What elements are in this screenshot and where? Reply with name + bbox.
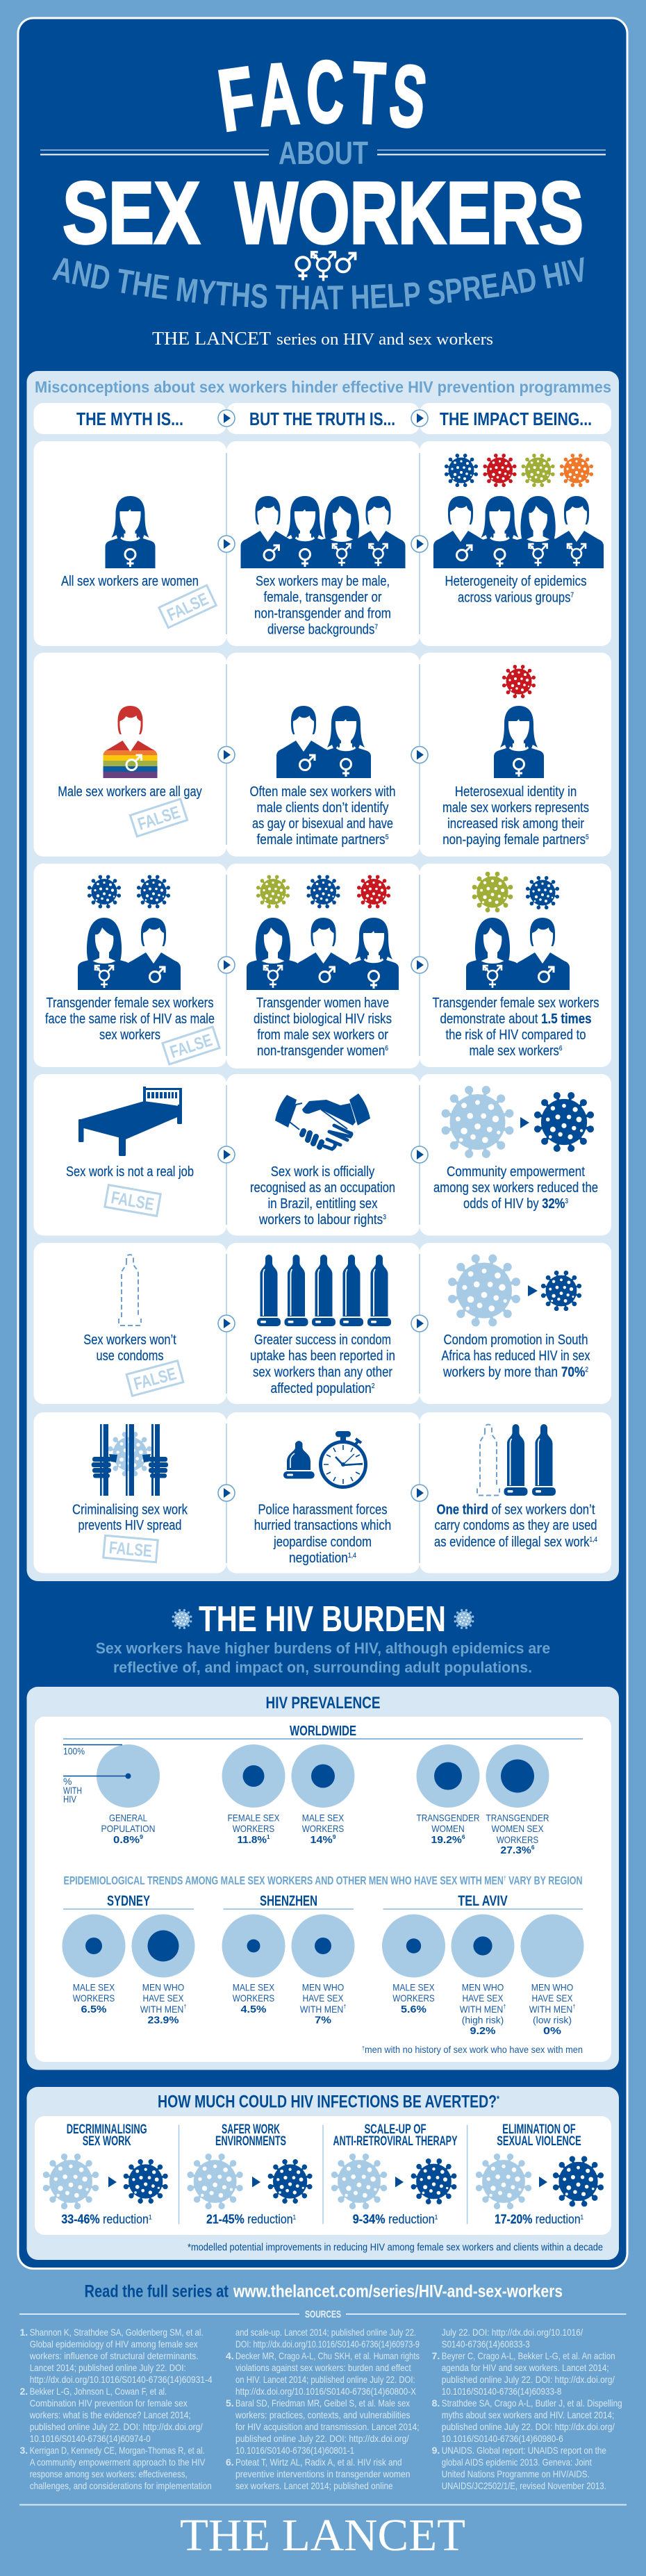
title: FACTS	[213, 43, 432, 150]
impact text: 3	[565, 1198, 568, 1205]
sources: column 2: violations against sex workers: burden and effect	[235, 2362, 411, 2373]
impact text: carry condoms as they are used	[435, 1518, 597, 1533]
impact text: 7	[570, 592, 574, 599]
chart: Shenzhen: 4.5%	[240, 2004, 267, 2015]
chart: Tel Aviv: †	[572, 2004, 575, 2010]
chart: Tel Aviv: WITH MEN	[460, 2004, 509, 2015]
sources: column 1: Global epidemiology of HIV among female sex	[30, 2338, 198, 2350]
labels: MALE SEX	[302, 1812, 345, 1823]
footer: The Lancet logo: THE LANCET	[180, 2510, 465, 2561]
stamp: false: FALSE	[135, 802, 183, 834]
icon: gender symbols	[296, 252, 356, 281]
truth text: negotiation	[289, 1551, 357, 1566]
sources: column 1	[19, 2327, 213, 2491]
sources: column 1: Kerrigan D, Kennedy CE, Morgan-Thomas R, et al.	[30, 2445, 205, 2456]
chart: Shenzhen: HAVE SEX	[303, 1992, 344, 2004]
labels: 9	[140, 1834, 144, 1840]
sources: column 2: and scale-up. Lancet 2014; published online July 22.	[235, 2327, 416, 2338]
sources: column 2: sex workers. Lancet 2014; published online	[235, 2480, 393, 2491]
row 2: male sex workers are all gay	[33, 653, 611, 857]
impact text: the risk of HIV compared to	[446, 1027, 586, 1043]
icon: four people	[240, 496, 406, 568]
impact text: Condom promotion in South	[443, 1332, 588, 1348]
scenario: elimination of sexual violence: SEXUAL VIOLENCE	[497, 2134, 581, 2149]
myth text: face the same risk of HIV as male	[45, 1012, 215, 1027]
myth text: Criminalising sex work	[72, 1502, 188, 1517]
truth text: recognised as an occupation	[250, 1180, 395, 1196]
scenario: scale-up of ART: SCALE-UP OF	[364, 2122, 426, 2137]
impact text: increased risk among their	[447, 816, 584, 832]
truth text	[250, 784, 396, 848]
impact text: 1,4	[589, 1536, 597, 1544]
scenario: safer work environments: 21-45% reduction	[206, 2213, 299, 2227]
legend: 100%	[63, 1745, 85, 1756]
column headers: BUT THE TRUTH IS...	[249, 408, 395, 429]
scenario: scale-up of ART: 1	[435, 2214, 438, 2221]
myth text: use condoms	[96, 1348, 164, 1364]
scenario: safer work environments: SAFER WORK	[222, 2122, 280, 2137]
truth text: Sex work is officially	[271, 1164, 374, 1180]
title: FACTS: C	[306, 43, 344, 141]
impact text: workers by more than 70%	[443, 1364, 589, 1380]
sources: column 1: A community empowerment approach to the HIV	[30, 2457, 206, 2468]
chart: Shenzhen: WITH MEN	[300, 2004, 349, 2015]
impact text: demonstrate about 1.5 times	[440, 1012, 592, 1027]
row 4: sex work is not a real job	[33, 1074, 611, 1235]
chart: Tel Aviv: 5.6%	[401, 2004, 426, 2015]
chart: worldwide prevalence	[63, 1724, 583, 1856]
chart: Tel Aviv: (high risk)	[462, 2015, 504, 2026]
chart: Tel Aviv: HAVE SEX	[463, 1992, 504, 2004]
title: FACTS: F	[213, 48, 260, 150]
sources: column 2: DOI: http://dx.doi.org/10.1016/S0140-6736(14)60973-9	[235, 2338, 420, 2350]
truth text: non-transgender and from	[254, 606, 391, 621]
chart: Tel Aviv: TEL AVIV	[458, 1893, 508, 1909]
chart: worldwide prevalence: WORLDWIDE	[290, 1724, 356, 1739]
truth text	[254, 996, 392, 1059]
myth text: Sex workers won’t	[83, 1332, 176, 1348]
title: SEX WORKERS	[63, 164, 583, 262]
title: ABOUT with rules: ABOUT	[279, 135, 368, 171]
impact text: Transgender female sex workers	[432, 996, 599, 1011]
sources: column 2: 5.	[226, 2397, 234, 2409]
chart: Tel Aviv: MEN WHO	[531, 1981, 573, 1992]
panel: misconceptions	[26, 371, 619, 1581]
chart: Shenzhen: WORKERS	[233, 1992, 274, 2004]
labels: 0.8%	[113, 1834, 137, 1846]
footnote: dagger: men with no history of sex work who have sex with men	[365, 2044, 583, 2055]
chart: Sydney	[63, 1893, 194, 2026]
truth text: workers to labour rights	[259, 1212, 404, 1228]
labels: WORKERS	[302, 1823, 344, 1834]
scenario: decriminalising: 33-46% reduction	[61, 2213, 155, 2227]
impact text: Heterogeneity of epidemics	[445, 574, 586, 589]
scenario: elimination of sexual violence	[476, 2122, 604, 2227]
scenario: scale-up of ART: 9-34% reduction	[353, 2213, 440, 2227]
myth text	[83, 1332, 176, 1364]
truth text: Transgender women have	[256, 996, 389, 1011]
chart: Sydney: 6.5%	[81, 2004, 107, 2015]
impact text	[442, 1332, 590, 1380]
sources: column 2: preventive interventions in transgender women	[235, 2468, 410, 2479]
sources: column 3: 10.1016/S0140-6736(14)60980-6	[442, 2433, 563, 2444]
sources: column 3: United Nations Programme on HIV/AIDS.	[442, 2468, 590, 2479]
labels	[101, 1812, 549, 1856]
chart: Shenzhen: 7%	[315, 2015, 331, 2026]
truth text: 2	[372, 1382, 375, 1390]
subheading: burden explanation: Sex workers have higher burdens of HIV, although epidemics are	[96, 1640, 550, 1657]
icon: handshake	[275, 1093, 370, 1149]
sources: column 3: published online July 22. DOI: http://dx.doi.org/	[442, 2421, 615, 2432]
column headers: THE IMPACT BEING...	[440, 408, 592, 429]
icon: woman	[106, 496, 156, 568]
sources: column 1: response among sex workers: effectiveness,	[30, 2468, 188, 2479]
chart: Shenzhen: MEN WHO	[302, 1981, 344, 1992]
labels: WORKERS	[497, 1834, 538, 1845]
heading: the HIV burden: THE HIV BURDEN	[199, 1599, 446, 1640]
icon: viruses and people	[78, 875, 181, 990]
labels: 1	[267, 1834, 270, 1840]
chart: Tel Aviv: †	[503, 2004, 506, 2010]
truth text: 1,4	[348, 1552, 356, 1560]
legend: HIV	[63, 1794, 77, 1805]
sources: column 2	[226, 2327, 420, 2491]
sources: column 3: 8.	[432, 2397, 440, 2409]
chart: Shenzhen	[222, 1893, 354, 2026]
myth text: Transgender female sex workers	[46, 996, 214, 1011]
chart: Shenzhen: MALE SEX	[233, 1981, 275, 1992]
icon: five condoms	[257, 1255, 391, 1326]
myth text: sex workers	[99, 1027, 160, 1043]
impact text: male sex workers represents	[442, 800, 589, 816]
icon: viruses and people	[466, 872, 570, 990]
sources: column 2: 4.	[226, 2350, 234, 2361]
sources: column 2: 10.1016/S0140-6736(14)60801-1	[235, 2445, 354, 2456]
chart: Tel Aviv: WITH MEN	[529, 2004, 579, 2015]
chart: Tel Aviv: MALE SEX	[392, 1981, 435, 1992]
stamp: false: FALSE	[108, 1538, 153, 1561]
truth text: female intimate partners	[257, 832, 406, 848]
truth text: non-transgender women	[257, 1043, 408, 1059]
impact text: Africa has reduced HIV in sex	[442, 1348, 590, 1364]
legend	[63, 1745, 85, 1805]
icon: rainbow man	[103, 706, 158, 778]
panel: infections averted	[26, 2087, 619, 2260]
scenario: decriminalising	[43, 2122, 168, 2227]
sources: column 3	[432, 2327, 622, 2491]
sources: column 3: global AIDS epidemic 2013. Geneva: Joint	[442, 2457, 592, 2468]
legend: WITH	[63, 1785, 82, 1796]
column headers	[33, 403, 611, 434]
scenario: scale-up of ART: ANTI-RETROVIRAL THERAPY	[333, 2134, 458, 2149]
stamp: false: FALSE	[132, 1364, 179, 1394]
stamp: false: FALSE	[110, 1188, 156, 1214]
labels: WOMEN SEX	[492, 1823, 544, 1834]
sources: column 1: Shannon K, Strathdee SA, Goldenberg SM, et al.	[30, 2327, 204, 2338]
sources: column 1: 10.1016/S0140-6736(14)60974-0	[30, 2433, 151, 2444]
call to action: www.thelancet.com/series/HIV-and-sex-workers	[233, 2281, 563, 2301]
labels: WOMEN	[431, 1823, 465, 1834]
impact text: 5	[586, 834, 589, 841]
truth text: 5	[386, 834, 389, 841]
impact text: odds of HIV by 32%	[463, 1196, 570, 1212]
impact text: One third of sex workers don’t	[436, 1502, 595, 1517]
sources: column 2: published online July 22. DOI: http://dx.doi.org/	[235, 2433, 409, 2444]
sources: column 1: published online July 22. DOI: http://dx.doi.org/	[30, 2421, 203, 2432]
chart: Tel Aviv: (low risk)	[533, 2015, 572, 2026]
labels: 9	[333, 1834, 336, 1840]
series line: series on HIV and sex workers	[276, 331, 493, 349]
chart: Tel Aviv	[382, 1893, 583, 2037]
myth text	[45, 996, 215, 1043]
truth text	[254, 574, 391, 638]
title: FACTS: T	[350, 43, 388, 142]
chart: Sydney: HAVE SEX	[143, 1992, 184, 2004]
sources: column 1: workers: what is the evidence? Lancet 2014;	[29, 2409, 191, 2420]
truth text	[250, 1332, 395, 1396]
truth text: Often male sex workers with	[250, 784, 396, 800]
sources: column 1: workers: influence of structural determinants.	[29, 2350, 199, 2361]
chart: Sydney: †	[183, 2004, 186, 2010]
sources: column 3: myths about sex workers and HIV. Lancet 2014;	[442, 2409, 614, 2420]
scenario: decriminalising: DECRIMINALISING	[67, 2122, 147, 2137]
sources: column 3: 7.	[432, 2350, 440, 2361]
truth text: diverse backgrounds	[267, 622, 396, 638]
heading: how much could be averted: *	[497, 2094, 500, 2104]
sources: column 3: UNAIDS/JC2502/1/E, revised November 2013.	[442, 2480, 606, 2491]
truth text: sex workers than any other	[253, 1364, 392, 1380]
sources: column 3: S0140-6736(14)60833-3	[442, 2338, 530, 2350]
sources: column 3: 9.	[432, 2445, 440, 2456]
myth text	[72, 1502, 188, 1533]
scenario: elimination of sexual violence: 17-20% reduction	[495, 2213, 587, 2227]
sources: column 3: agenda for HIV and sex workers. Lancet 2014;	[442, 2362, 609, 2373]
call to action: Read the full series at	[85, 2281, 229, 2301]
heading: misconceptions: Misconceptions about sex workers hinder effective HIV prevention programmes	[35, 378, 611, 396]
truth text: affected population	[271, 1381, 388, 1396]
sources: column 2: workers: practices, contexts, and vulnerabilities	[235, 2409, 410, 2420]
truth text: Police harassment forces	[258, 1502, 388, 1517]
labels: TRANSGENDER	[417, 1812, 479, 1823]
scenario: safer work environments: 1	[293, 2214, 296, 2221]
impact text: among sex workers reduced the	[433, 1180, 598, 1196]
chart: Sydney: MALE SEX	[73, 1981, 115, 1992]
truth text: 3	[383, 1214, 386, 1221]
labels: 6	[531, 1844, 535, 1851]
truth text	[254, 1502, 391, 1566]
truth text: uptake has been reported in	[250, 1348, 395, 1364]
sources: column 1: Combination HIV prevention for female sex	[30, 2397, 188, 2409]
labels: POPULATION	[101, 1823, 156, 1834]
chart: Tel Aviv: 0%	[543, 2025, 561, 2037]
chart: Sydney: 23.9%	[147, 2015, 179, 2026]
sources: column 2: on HIV. Lancet 2014; published online July 22. DOI:	[235, 2374, 415, 2385]
sources: column 1: challenges, and considerations for implementation	[30, 2480, 212, 2491]
chart: Shenzhen: †	[343, 2004, 346, 2010]
icon: viruses and people	[247, 875, 399, 990]
subheading: burden explanation: reflective of, and impact on, surrounding adult populations.	[113, 1659, 532, 1676]
sources: column 1: Bekker L-G, Johnson L, Cowan F, et al.	[30, 2386, 167, 2397]
impact text: across various groups	[458, 591, 594, 606]
icon: four people	[433, 496, 604, 568]
title: SEX WORKERS: SEX	[63, 164, 200, 262]
chart: Tel Aviv: HAVE SEX	[532, 1992, 573, 2004]
panel: HIV prevalence	[26, 1687, 619, 2070]
sources: column 1: http://dx.doi.org/10.1016/S0140-6736(14)60931-4	[30, 2374, 213, 2385]
chart: Tel Aviv: MEN WHO	[462, 1981, 504, 1992]
labels: 27.3%	[500, 1844, 530, 1856]
scenario: elimination of sexual violence: ELIMINATION OF	[502, 2122, 576, 2137]
truth text: from male sex workers or	[257, 1027, 388, 1043]
subtitle: curved myth line: AND THE MYTHS THAT HELP SPREAD HIV	[52, 257, 583, 310]
icon: bed	[78, 1087, 182, 1156]
scenario: safer work environments: ENVIRONMENTS	[215, 2134, 286, 2149]
truth text: as gay or bisexual and have	[252, 816, 393, 832]
series line: THE LANCET	[152, 328, 272, 349]
sources: column 1: 1.	[19, 2327, 28, 2338]
truth text: jeopardise condom	[273, 1535, 372, 1550]
chart: Sydney: WITH MEN	[140, 2004, 190, 2015]
chart: Tel Aviv: 9.2%	[470, 2025, 496, 2037]
row 5: sex workers won't use condoms	[33, 1243, 611, 1404]
call to action	[85, 2281, 563, 2301]
impact text	[442, 784, 589, 848]
labels: 6	[462, 1834, 465, 1840]
stamp: false: FALSE	[164, 589, 211, 625]
truth text: 7	[374, 624, 378, 631]
impact text: 6	[559, 1045, 563, 1052]
stamp: false: FALSE	[168, 1030, 215, 1062]
truth text: female, transgender or	[264, 590, 382, 605]
sources: column 3: July 22. DOI: http://dx.doi.org/10.1016/	[442, 2327, 583, 2338]
sources: column 1: 3.	[19, 2445, 28, 2456]
sources: column 2: Poteat T, Wirtz AL, Radix A, et al. HIV risk and	[235, 2457, 402, 2468]
truth text	[250, 1164, 395, 1228]
truth text: distinct biological HIV risks	[254, 1012, 392, 1027]
chart: Shenzhen: SHENZHEN	[260, 1893, 317, 1909]
impact text: Heterosexual identity in	[455, 784, 577, 800]
heading: epidemiological trends: EPIDEMIOLOGICAL TRENDS AMONG MALE SEX WORKERS AND OTHER MEN WHO HAVE SEX WITH MEN	[64, 1874, 646, 1887]
icon: dashed condom	[119, 1255, 141, 1326]
truth text: in Brazil, entitling sex	[268, 1196, 378, 1212]
chart: Sydney: WORKERS	[73, 1992, 115, 2004]
icon: four viruses	[445, 454, 593, 487]
sources: column 3: UNAIDS. Global report: UNAIDS report on the	[442, 2445, 606, 2456]
sources heading: SOURCES	[305, 2309, 341, 2320]
impact text	[432, 996, 599, 1059]
icon: condom and stopwatch	[283, 1431, 365, 1487]
subheading: burden explanation	[96, 1640, 550, 1676]
chart: Sydney: MEN WHO	[142, 1981, 184, 1992]
sources: column 1: Lancet 2014; published online July 22. DOI:	[30, 2362, 186, 2373]
labels: TRANSGENDER	[486, 1812, 549, 1823]
footnote: dagger: †	[362, 2045, 365, 2051]
heading: HIV prevalence: HIV PREVALENCE	[265, 1694, 381, 1712]
series line	[152, 328, 493, 349]
scenario: decriminalising: 1	[149, 2214, 151, 2221]
truth text: Greater success in condom	[254, 1332, 391, 1348]
sources: column 2: for HIV acquisition and transmission. Lancet 2014;	[235, 2421, 420, 2432]
title: FACTS: S	[384, 45, 432, 147]
labels: 14%	[310, 1834, 331, 1846]
row 3: transgender female sex workers	[33, 864, 611, 1068]
scenario: elimination of sexual violence: 1	[581, 2214, 583, 2221]
heading: epidemiological trends: †	[504, 1874, 506, 1881]
labels: WORKERS	[233, 1823, 274, 1834]
heading: epidemiological trends: VARY BY REGION	[506, 1874, 583, 1887]
myth text: Male sex workers are all gay	[58, 784, 202, 800]
labels: FEMALE SEX	[228, 1812, 280, 1823]
myth text: prevents HIV spread	[78, 1518, 182, 1533]
impact text	[434, 1502, 597, 1550]
truth text: Sex workers may be male,	[256, 574, 390, 589]
icon: condoms, one dashed	[477, 1424, 556, 1496]
labels: 11.8%	[238, 1834, 266, 1846]
title: FACTS: A	[255, 44, 302, 145]
labels: GENERAL	[109, 1812, 147, 1823]
impact text: non-paying female partners	[442, 832, 612, 848]
scenario: scale-up of ART	[331, 2122, 458, 2227]
scenario: safer work environments	[187, 2122, 313, 2227]
sources: column 1: 2.	[19, 2386, 28, 2397]
sources: column 2: http://dx.doi.org/10.1016/S0140-6736(14)60800-X	[235, 2386, 417, 2397]
icon: man and woman	[276, 706, 371, 778]
impact text: Community empowerment	[447, 1164, 585, 1180]
row 6: criminalising sex work	[33, 1412, 611, 1573]
sources: column 2: 6.	[226, 2457, 234, 2468]
heading: how much could be averted: HOW MUCH COULD HIV INFECTIONS BE AVERTED?	[158, 2092, 593, 2112]
impact text: as evidence of illegal sex work	[434, 1535, 622, 1550]
sources: column 3: published online July 22. DOI: http://dx.doi.org/	[442, 2374, 615, 2385]
column headers: THE MYTH IS...	[76, 408, 183, 429]
sources: column 3: 10.1016/S0140-6736(14)60933-8	[442, 2386, 562, 2397]
icon: virus and woman	[494, 665, 544, 778]
truth text: 6	[385, 1045, 388, 1052]
labels: 19.2%	[431, 1834, 461, 1846]
row 1: all sex workers are women	[33, 441, 611, 646]
icon: virus reduction	[442, 1086, 594, 1158]
truth text: hurried transactions which	[254, 1518, 391, 1533]
chart: Sydney: SYDNEY	[107, 1893, 150, 1909]
sources: column 2: Baral SD, Friedman MR, Geibel S, et al. Male sex	[235, 2397, 410, 2409]
sources: column 2: Decker MR, Crago A-L, Chu SKH, et al. Human rights	[235, 2350, 420, 2361]
impact text	[445, 574, 586, 606]
icon: virus reduction	[448, 1255, 581, 1326]
impact text: male sex workers	[470, 1043, 577, 1059]
scenario: decriminalising: SEX WORK	[83, 2134, 131, 2149]
legend: %	[63, 1776, 72, 1787]
chart: Tel Aviv: WORKERS	[392, 1992, 435, 2004]
myth text: Sex work is not a real job	[66, 1164, 194, 1180]
truth text: male clients don’t identify	[257, 800, 389, 816]
impact text	[433, 1164, 598, 1212]
icon: jailed virus	[92, 1424, 168, 1496]
myth text: All sex workers are women	[61, 574, 199, 589]
impact text: 2	[585, 1366, 588, 1374]
